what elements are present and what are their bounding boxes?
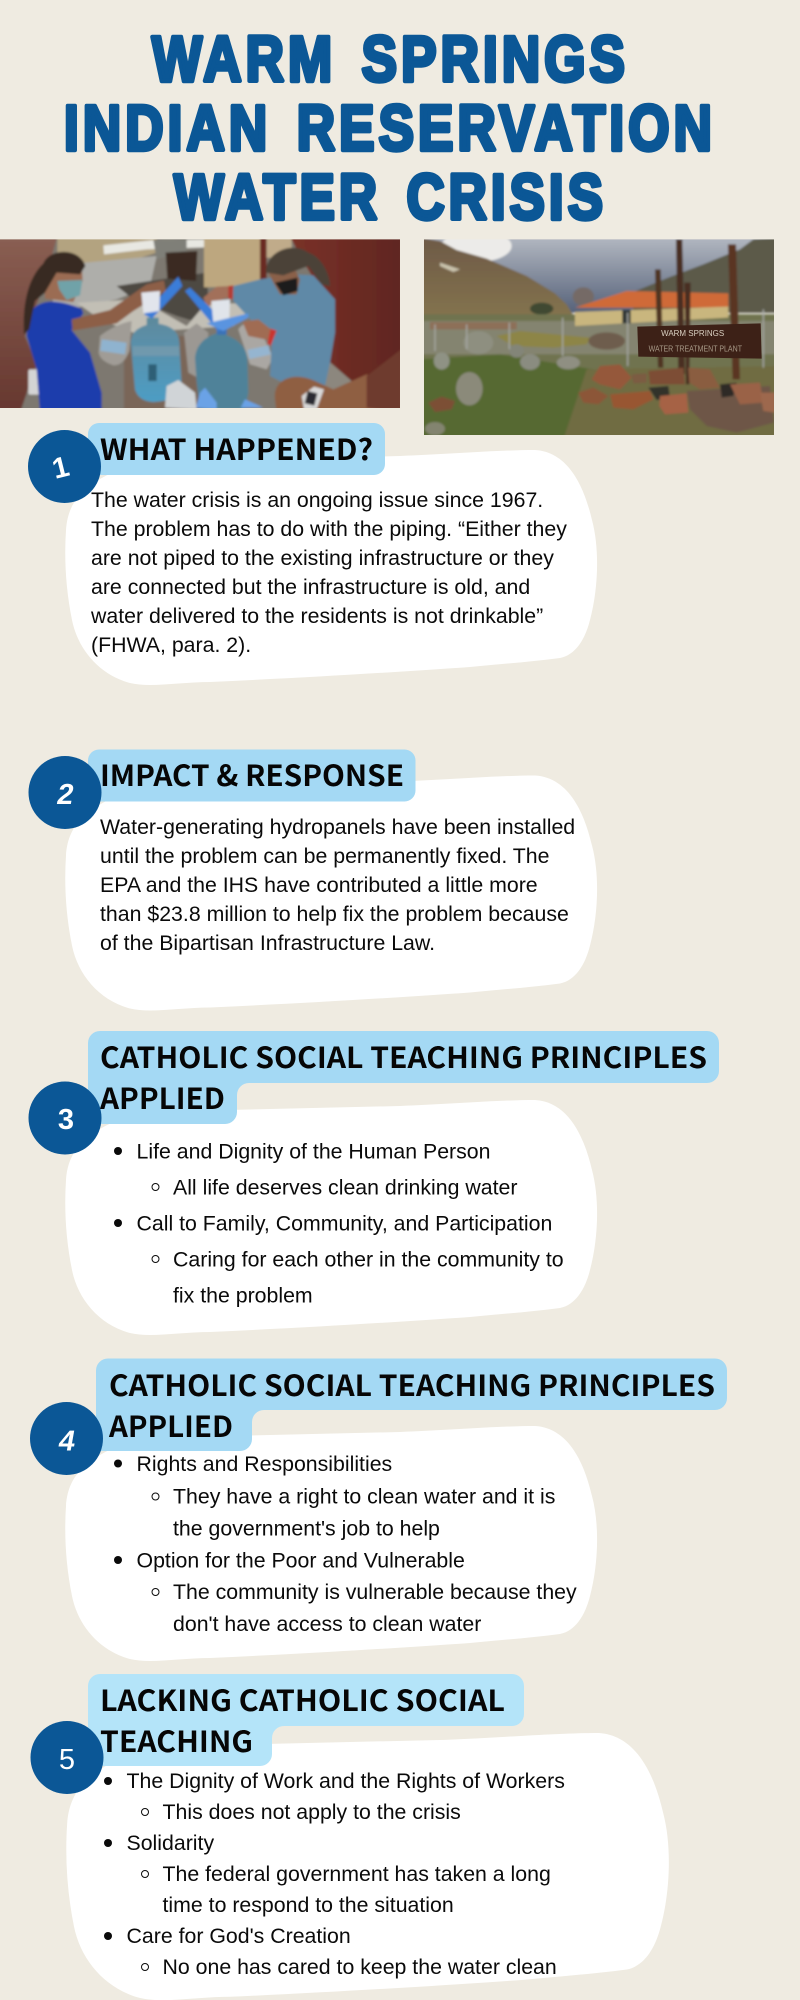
- panel 4 number badge: [30, 1402, 103, 1475]
- panel 5 heading tag: [88, 1674, 524, 1766]
- panel 1 body text: The water crisis is an ongoing issue since 1967.: [91, 488, 543, 512]
- panel 1 body text: are connected but the infrastructure is old, and: [91, 575, 530, 599]
- title: [64, 23, 716, 233]
- panel 3 bullet list: Life and Dignity of the Human Person: [136, 1140, 490, 1164]
- panel 5 bullet list: [104, 1769, 565, 1979]
- panel 4 number badge: 4: [56, 1426, 79, 1457]
- panel 5 bullet list: No one has cared to keep the water clean: [162, 1955, 557, 1979]
- panel 2: impact and response: [28, 750, 597, 1010]
- panel 3 heading: [99, 1035, 707, 1118]
- panel 1 number badge: 1: [49, 451, 73, 486]
- title: WATER CRISIS: [174, 161, 607, 233]
- panel 2 body text: of the Bipartisan Infrastructure Law.: [100, 931, 435, 955]
- panel 5 bullet list: Care for God's Creation: [126, 1924, 351, 1948]
- panel 5 white blob: [66, 1733, 669, 2000]
- panel 2 heading tag: [88, 750, 416, 802]
- panel 1: what happened: [28, 423, 597, 685]
- sign board: WARM SPRINGS: [661, 329, 724, 338]
- panel 5 bullet list: The Dignity of Work and the Rights of Workers: [126, 1769, 565, 1793]
- panel 2 white blob: [65, 776, 597, 1010]
- panel 5 bullet list: The federal government has taken a long: [162, 1862, 551, 1886]
- panel 5 heading: TEACHING: [100, 1719, 253, 1761]
- panel 1 body text: The problem has to do with the piping. “Either they: [91, 517, 567, 541]
- panel 4: catholic social teaching principles applied: [30, 1358, 727, 1661]
- panel 3 bullet list: All life deserves clean drinking water: [173, 1176, 517, 1200]
- panel 3 bullet list: Call to Family, Community, and Participation: [136, 1212, 552, 1236]
- panel 3 number badge: 3: [58, 1104, 74, 1136]
- panel 1 number badge: [28, 430, 101, 503]
- panel 4 heading: CATHOLIC SOCIAL TEACHING PRINCIPLES: [109, 1363, 715, 1405]
- panel 4 heading tag: [96, 1358, 727, 1451]
- panel 4 bullet list: Option for the Poor and Vulnerable: [136, 1548, 465, 1572]
- panel 2 body text: Water-generating hydropanels have been installed: [100, 815, 575, 839]
- panel 4 white blob: [65, 1426, 597, 1661]
- sign board: WATER TREATMENT PLANT: [649, 345, 742, 354]
- photo: water treatment plant sign: [420, 230, 780, 439]
- panel 5 bullet list: Solidarity: [126, 1831, 214, 1855]
- panel 2 body text: than $23.8 million to help fix the problem because: [100, 902, 569, 926]
- panel 4 bullet list: the government's job to help: [173, 1516, 440, 1540]
- panel 3 white blob: [65, 1100, 597, 1335]
- sign board: [637, 323, 762, 359]
- panel 3 bullet list: [114, 1140, 564, 1308]
- panel 1 heading tag: [88, 423, 385, 475]
- panel 1 body text: are not piped to the existing infrastructure or they: [91, 546, 554, 570]
- panel 5 heading: [100, 1678, 505, 1761]
- panel 4 bullet list: don't have access to clean water: [173, 1612, 481, 1636]
- panel 4 bullet list: The community is vulnerable because they: [173, 1580, 577, 1604]
- panel 5 heading: LACKING CATHOLIC SOCIAL: [100, 1678, 505, 1720]
- panel 5 number badge: [30, 1721, 104, 1794]
- panel 3 bullet list: Caring for each other in the community to: [173, 1248, 564, 1272]
- panel 4 bullet list: They have a right to clean water and it is: [173, 1484, 555, 1508]
- panel 3 bullet list: fix the problem: [173, 1284, 313, 1308]
- panel 4 bullet list: [114, 1452, 577, 1636]
- panel 5: lacking catholic social teaching: [30, 1674, 669, 2000]
- panel 2 body text: EPA and the IHS have contributed a little more: [100, 873, 538, 897]
- photo: volunteers filling water jugs: [0, 236, 403, 413]
- title: WARM SPRINGS: [152, 23, 629, 95]
- panel 5 bullet list: This does not apply to the crisis: [162, 1800, 461, 1824]
- panel 1 heading: WHAT HAPPENED?: [100, 427, 373, 469]
- panel 1 body text: [90, 488, 567, 657]
- panel 2 heading: IMPACT & RESPONSE: [100, 753, 404, 795]
- panel 2 number badge: 2: [55, 779, 76, 811]
- panel 3 heading tag: [88, 1031, 719, 1124]
- panel 1 body text: (FHWA, para. 2).: [91, 633, 251, 657]
- panel 2 number badge: [28, 756, 102, 829]
- panel 3 heading: CATHOLIC SOCIAL TEACHING PRINCIPLES: [100, 1035, 707, 1077]
- panel 1 body text: water delivered to the residents is not drinkable”: [90, 604, 543, 628]
- panel 3: catholic social teaching principles applied: [28, 1031, 719, 1335]
- panel 1 white blob: [65, 450, 597, 685]
- panel 5 number badge: 5: [59, 1744, 75, 1776]
- panel 3 heading: APPLIED: [99, 1076, 225, 1118]
- panel 2 body text: [100, 815, 575, 955]
- panel 5 bullet list: time to respond to the situation: [162, 1893, 454, 1917]
- panel 4 heading: APPLIED: [108, 1404, 233, 1446]
- panel 2 body text: until the problem can be permanently fixed. The: [100, 844, 549, 868]
- panel 3 number badge: [28, 1082, 102, 1154]
- panel 4 heading: [108, 1363, 715, 1446]
- panel 4 bullet list: Rights and Responsibilities: [136, 1452, 392, 1476]
